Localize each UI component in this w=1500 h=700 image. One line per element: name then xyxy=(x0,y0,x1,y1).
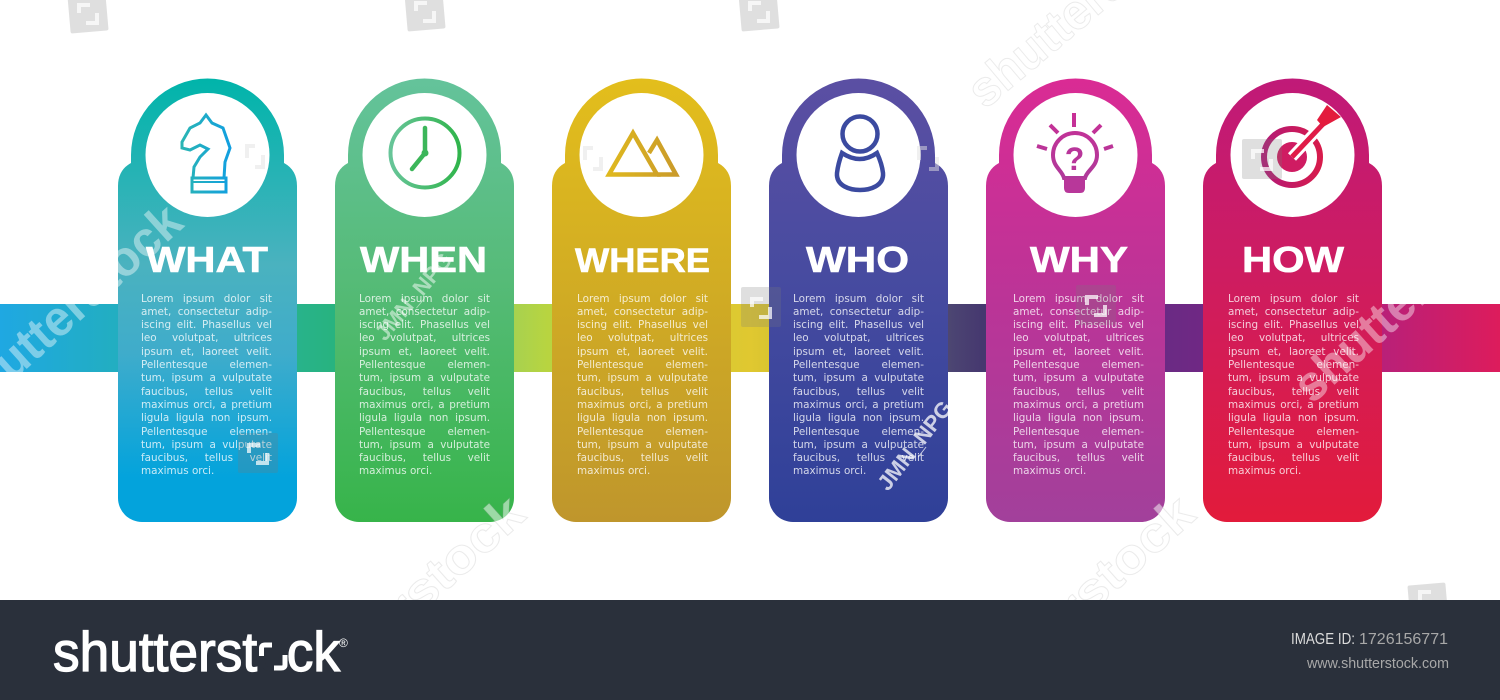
body text: where: maximus orci. xyxy=(577,465,650,477)
shutterstock logo: ® xyxy=(339,636,348,650)
body text: how: ipsum et, laoreet velit. xyxy=(1228,346,1359,358)
body text: when: tum, ipsum a vulputate xyxy=(359,372,490,384)
body text: when: Lorem ipsum dolor sit xyxy=(359,293,490,305)
body text: where: ipsum et, laoreet velit. xyxy=(577,346,708,358)
body text: who: Lorem ipsum dolor sit xyxy=(793,293,924,305)
body text: who: maximus orci. xyxy=(793,465,866,477)
body text: what: ligula ligula non ipsum. xyxy=(141,412,272,424)
body text: when: iscing elit. Phasellus vel xyxy=(359,319,490,331)
body text: when: leo volutpat, ultrices xyxy=(359,332,490,344)
body text: when: faucibus, tellus velit xyxy=(359,386,490,398)
body text: where: ligula ligula non ipsum. xyxy=(577,412,708,424)
body text: when: Pellentesque elemen- xyxy=(359,359,490,371)
heading: who: WHO xyxy=(806,239,909,280)
body text: where xyxy=(577,293,708,477)
icon: light bulb with question mark xyxy=(1037,113,1113,193)
body text: when: maximus orci, a pretium xyxy=(359,399,490,411)
card: how xyxy=(1203,78,1382,522)
body text: why: tum, ipsum a vulputate xyxy=(1013,372,1144,384)
body text: how: amet, consectetur adip- xyxy=(1228,306,1359,318)
image id xyxy=(1291,631,1448,648)
body text: when: Pellentesque elemen- xyxy=(359,426,490,438)
body text: how: iscing elit. Phasellus vel xyxy=(1228,319,1359,331)
body text: why: ligula ligula non ipsum. xyxy=(1013,412,1144,424)
body text: what xyxy=(141,293,272,477)
body text: what: tum, ipsum a vulputate xyxy=(141,372,272,384)
body text: where: amet, consectetur adip- xyxy=(577,306,708,318)
body text: where: iscing elit. Phasellus vel xyxy=(577,319,708,331)
body text: how: tum, ipsum a vulputate xyxy=(1228,372,1359,384)
body text: why: ipsum et, laoreet velit. xyxy=(1013,346,1144,358)
body text: how: maximus orci, a pretium xyxy=(1228,399,1359,411)
body text: where: Pellentesque elemen- xyxy=(577,359,708,371)
body text: who: leo volutpat, ultrices xyxy=(793,332,924,344)
body text: why: Pellentesque elemen- xyxy=(1013,359,1144,371)
body text: who: faucibus, tellus velit xyxy=(793,386,924,398)
website url: www.shutterstock.com xyxy=(1306,655,1449,672)
heading: what: WHAT xyxy=(146,239,268,280)
watermark overlay: JMN_NPG xyxy=(872,396,957,495)
body text: why: iscing elit. Phasellus vel xyxy=(1013,319,1144,331)
icon: target with arrow xyxy=(1264,105,1341,185)
body text: where: Pellentesque elemen- xyxy=(577,426,708,438)
body text: why: leo volutpat, ultrices xyxy=(1013,332,1144,344)
body text: why: Lorem ipsum dolor sit xyxy=(1013,293,1144,305)
body text: who: faucibus, tellus velit xyxy=(793,452,924,464)
body text: how: maximus orci. xyxy=(1228,465,1301,477)
body text: what: faucibus, tellus velit xyxy=(141,452,272,464)
body text: where: tum, ipsum a vulputate xyxy=(577,439,708,451)
body text: who: Pellentesque elemen- xyxy=(793,426,924,438)
body text: where: Lorem ipsum dolor sit xyxy=(577,293,708,305)
body text: how xyxy=(1228,293,1359,477)
body text: why: maximus orci, a pretium xyxy=(1013,399,1144,411)
body text: who: amet, consectetur adip- xyxy=(793,306,924,318)
body text: why: maximus orci. xyxy=(1013,465,1086,477)
image id: 1726156771 xyxy=(1359,631,1448,648)
body text: how: Pellentesque elemen- xyxy=(1228,359,1359,371)
body text: who: tum, ipsum a vulputate xyxy=(793,439,924,451)
body text: when: tum, ipsum a vulputate xyxy=(359,439,490,451)
heading: how: HOW xyxy=(1242,239,1344,280)
body text: what: amet, consectetur adip- xyxy=(141,306,272,318)
heading: where: WHERE xyxy=(575,242,710,280)
body text: why: tum, ipsum a vulputate xyxy=(1013,439,1144,451)
body text: what: Pellentesque elemen- xyxy=(141,359,272,371)
body text: why: Pellentesque elemen- xyxy=(1013,426,1144,438)
body text: why xyxy=(1013,293,1144,477)
body text: where: tum, ipsum a vulputate xyxy=(577,372,708,384)
watermark overlay: JMN_NPG xyxy=(370,248,457,345)
body text: where: faucibus, tellus velit xyxy=(577,386,708,398)
heading: when: WHEN xyxy=(360,239,487,280)
body text: who: tum, ipsum a vulputate xyxy=(793,372,924,384)
body text: how: faucibus, tellus velit xyxy=(1228,452,1359,464)
body text: who: Pellentesque elemen- xyxy=(793,359,924,371)
heading: why: WHY xyxy=(1030,239,1128,280)
body text: when: ligula ligula non ipsum. xyxy=(359,412,490,424)
card: what xyxy=(118,78,297,522)
body text: where: faucibus, tellus velit xyxy=(577,452,708,464)
body text: when: faucibus, tellus velit xyxy=(359,452,490,464)
body text: who xyxy=(793,293,924,477)
card: where xyxy=(552,78,731,522)
body text: why: faucibus, tellus velit xyxy=(1013,452,1144,464)
body text: what: Lorem ipsum dolor sit xyxy=(141,293,272,305)
body text: why: amet, consectetur adip- xyxy=(1013,306,1144,318)
body text: how: faucibus, tellus velit xyxy=(1228,386,1359,398)
icon: mountains xyxy=(609,133,676,174)
body text: what: Pellentesque elemen- xyxy=(141,426,272,438)
horizontal gradient band xyxy=(0,304,1500,372)
body text: what: maximus orci. xyxy=(141,465,214,477)
icon: person xyxy=(837,116,883,190)
image id: IMAGE ID: xyxy=(1291,631,1355,648)
body text: why: faucibus, tellus velit xyxy=(1013,386,1144,398)
icon: chess knight xyxy=(182,115,230,192)
body text: how: Pellentesque elemen- xyxy=(1228,426,1359,438)
body text: who: iscing elit. Phasellus vel xyxy=(793,319,924,331)
body text: what: iscing elit. Phasellus vel xyxy=(141,319,272,331)
body text: where: maximus orci, a pretium xyxy=(577,399,708,411)
footer bar xyxy=(0,600,1500,700)
body text: when: amet, consectetur adip- xyxy=(359,306,490,318)
icon: clock xyxy=(390,118,460,188)
body text: what: faucibus, tellus velit xyxy=(141,386,272,398)
body text: how: ligula ligula non ipsum. xyxy=(1228,412,1359,424)
body text: what: maximus orci, a pretium xyxy=(141,399,272,411)
body text: how: leo volutpat, ultrices xyxy=(1228,332,1359,344)
body text: when: ipsum et, laoreet velit. xyxy=(359,346,490,358)
icon: light bulb with question mark: ? xyxy=(1065,141,1084,177)
body text: how: Lorem ipsum dolor sit xyxy=(1228,293,1359,305)
body text: how: tum, ipsum a vulputate xyxy=(1228,439,1359,451)
body text: who: ligula ligula non ipsum. xyxy=(793,412,924,424)
card: when xyxy=(335,78,514,522)
body text: when: maximus orci. xyxy=(359,465,432,477)
body text: where: leo volutpat, ultrices xyxy=(577,332,708,344)
card: who xyxy=(769,78,948,522)
body text: when xyxy=(359,293,490,477)
shutterstock logo: shutterstock xyxy=(53,620,341,683)
body text: who: maximus orci, a pretium xyxy=(793,399,924,411)
body text: what: ipsum et, laoreet velit. xyxy=(141,346,272,358)
card: why xyxy=(986,78,1165,522)
body text: what: leo volutpat, ultrices xyxy=(141,332,272,344)
body text: who: ipsum et, laoreet velit. xyxy=(793,346,924,358)
body text: what: tum, ipsum a vulputate xyxy=(141,439,272,451)
